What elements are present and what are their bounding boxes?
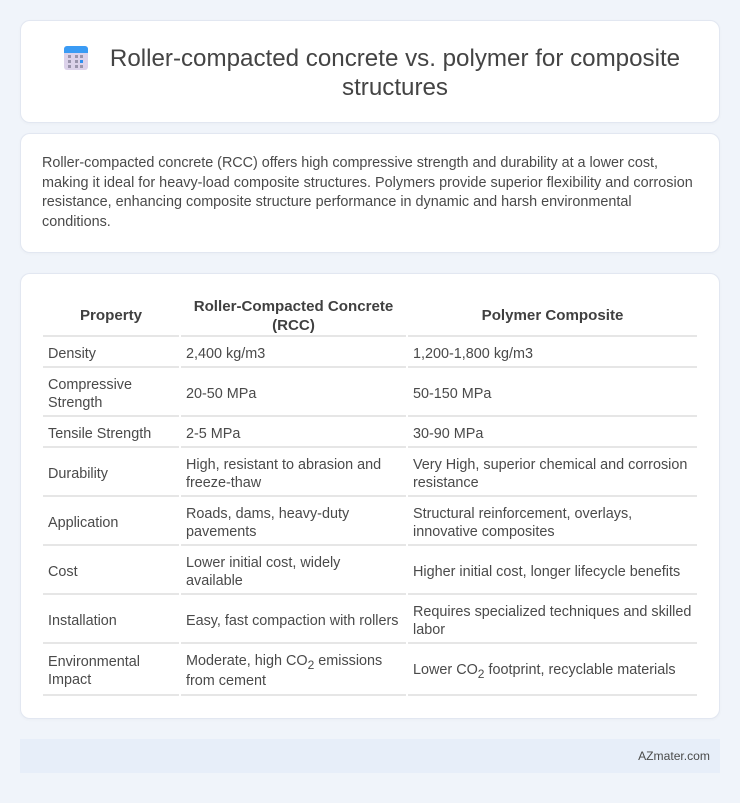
row: application: Roads, dams, heavy-duty <box>186 506 349 522</box>
footer credit: AZmater.com <box>638 749 710 763</box>
row: application: innovative composites <box>413 524 555 540</box>
row: installation: labor <box>413 622 445 638</box>
row: cost: Higher initial cost, longer lifecycle benefits <box>413 564 680 580</box>
table header: Polymer Composite <box>482 307 623 324</box>
table header: Roller-Compacted Concrete <box>194 298 393 315</box>
table header: Property <box>80 307 142 324</box>
row: cost: Cost <box>48 564 78 580</box>
row: density <box>48 346 533 362</box>
row: density: 2,400 kg/m3 <box>186 346 265 362</box>
title: structures <box>342 74 448 101</box>
row: tensile strength: 2-5 MPa <box>186 426 240 442</box>
comparison table <box>43 298 697 696</box>
row: application <box>48 506 632 540</box>
summary text: resistance, enhancing composite structure performance in dynamic and harsh environmental <box>42 194 632 210</box>
icon: calendar grid <box>64 46 88 70</box>
panel: summary card <box>20 133 720 253</box>
summary text: Roller-compacted concrete (RCC) offers high compressive strength and durability at a lower cost, <box>42 155 658 171</box>
row: environmental impact: Moderate, high CO2 emissions <box>186 653 382 672</box>
row: cost: Lower initial cost, widely <box>186 555 340 571</box>
row: application: Structural reinforcement, overlays, <box>413 506 632 522</box>
row: environmental impact <box>48 653 676 689</box>
row: installation <box>48 604 691 638</box>
row: durability: freeze-thaw <box>186 475 261 491</box>
row: cost <box>48 555 680 589</box>
row: durability: High, resistant to abrasion and <box>186 457 381 473</box>
row: environmental impact: Impact <box>48 672 91 688</box>
row: tensile strength: Tensile Strength <box>48 426 151 442</box>
row: density: 1,200-1,800 kg/m3 <box>413 346 533 362</box>
row: durability: resistance <box>413 475 479 491</box>
row: tensile strength: 30-90 MPa <box>413 426 483 442</box>
row: compressive strength: Strength <box>48 395 102 411</box>
table header <box>80 298 623 334</box>
panel: title card <box>20 20 720 123</box>
panel: comparison table card <box>20 273 720 719</box>
row: cost: available <box>186 573 243 589</box>
title <box>110 45 680 101</box>
summary text: making it ideal for heavy-load composite structures. Polymers provide superior flexibility and corrosion <box>42 174 693 190</box>
summary text <box>42 155 693 230</box>
row: installation: Requires specialized techniques and skilled <box>413 604 691 620</box>
row: compressive strength: 20-50 MPa <box>186 386 256 402</box>
row: durability: Durability <box>48 466 108 482</box>
row: durability: Very High, superior chemical and corrosion <box>413 457 687 473</box>
row: compressive strength <box>48 377 492 411</box>
title: Roller-compacted concrete vs. polymer for composite <box>110 45 680 72</box>
row: compressive strength: 50-150 MPa <box>413 386 491 402</box>
row: environmental impact: from cement <box>186 673 266 689</box>
row: application: pavements <box>186 524 256 540</box>
row: compressive strength: Compressive <box>48 377 132 393</box>
row: environmental impact: Environmental <box>48 654 140 670</box>
row: installation: Easy, fast compaction with rollers <box>186 613 398 629</box>
row: tensile strength <box>48 426 484 442</box>
footer bar <box>20 739 720 773</box>
row: application: Application <box>48 515 118 531</box>
summary text: conditions. <box>42 214 111 230</box>
row: installation: Installation <box>48 613 117 629</box>
row: durability <box>48 457 687 491</box>
row: density: Density <box>48 346 96 362</box>
table header: (RCC) <box>272 317 315 334</box>
row: environmental impact: Lower CO2 footprint, recyclable materials <box>413 662 676 681</box>
